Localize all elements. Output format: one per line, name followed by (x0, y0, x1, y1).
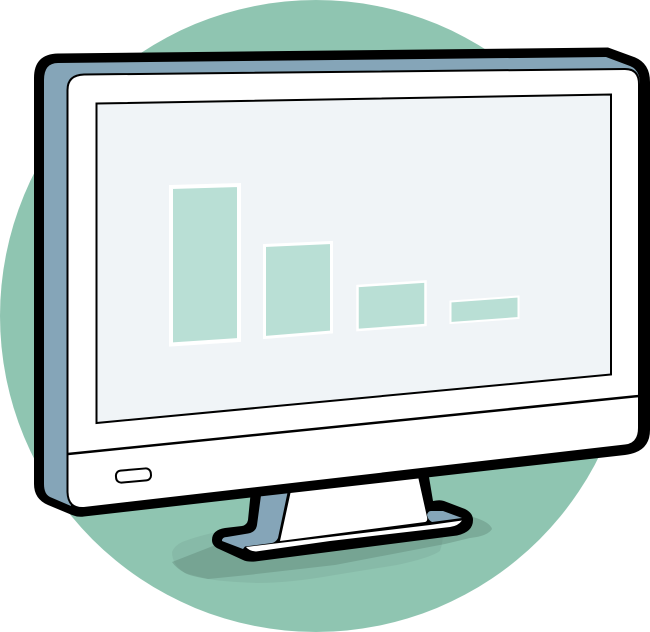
bar 1 (171, 185, 239, 344)
stand right blue face (427, 511, 462, 522)
monitor front panel (68, 69, 639, 508)
stand neck (280, 472, 427, 541)
bar chart (171, 185, 518, 344)
power button (116, 468, 151, 483)
bar 2 (264, 242, 332, 338)
monitor body outline (34, 48, 650, 517)
stand shadow (172, 510, 492, 583)
stand base strip (246, 520, 462, 552)
bar 3 (358, 282, 426, 330)
bar 4 (450, 296, 518, 323)
bezel divider line (68, 396, 639, 454)
screen (96, 94, 611, 423)
monitor stand (212, 465, 473, 562)
stand outline (212, 465, 473, 562)
stand left blue face (222, 486, 289, 549)
monitor side blue face (44, 57, 640, 506)
